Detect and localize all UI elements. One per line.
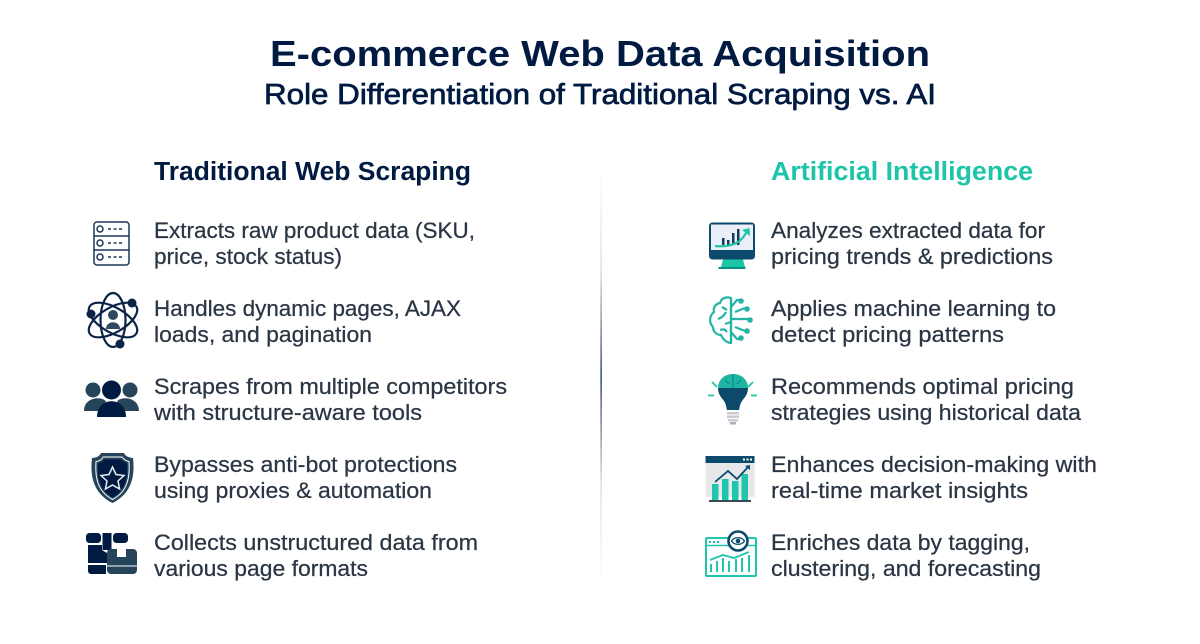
text: recommends: strategies using historical data [771,400,1082,425]
text: analyzes: pricing trends & predictions [771,244,1053,269]
text: enhances [771,452,1097,503]
text: enriches: Enriches data by tagging, [771,530,1030,555]
panel: artificial intelligence [706,158,1097,581]
text: extracts: price, stock status) [154,244,342,269]
text: applies: detect pricing patterns [771,322,1004,347]
text: handles [154,296,461,347]
title: E-commerce Web Data Acquisition [270,33,930,74]
text: scrapes: Scrapes from multiple competitors [154,374,507,399]
text: handles: loads, and pagination [154,322,372,347]
text: bypasses [154,452,457,503]
icon: analytics window with eye [706,532,756,576]
text: enhances: real-time market insights [771,478,1028,503]
icon: server [94,222,129,265]
icon: boxes [86,533,137,574]
icon: brain light bulb [708,374,757,424]
text: extracts: Extracts raw product data (SKU, [154,218,475,243]
icon: people [84,380,139,417]
text: enhances: Enhances decision-making with [771,452,1097,477]
text: scrapes [153,374,507,425]
text: bypasses: using proxies & automation [154,478,432,503]
text: analyzes [771,218,1053,269]
icon: AI brain [710,297,753,343]
text: handles: Handles dynamic pages, AJAX [154,296,461,321]
heading: artificial intelligence: Artificial Intelligence [771,158,1033,186]
text: applies [771,296,1056,347]
text: collects: various page formats [154,556,368,581]
text: applies: Applies machine learning to [771,296,1056,321]
subtitle: Role Differentiation of Traditional Scraping vs. AI [264,79,936,111]
text: collects: Collects unstructured data from [154,530,478,555]
icon: shield with star [91,453,134,503]
panel: traditional web scraping [83,158,507,581]
icon: atom with user [83,293,143,348]
text: collects [154,530,478,581]
text: recommends [771,374,1082,425]
text: enriches: clustering, and forecasting [771,556,1041,581]
text: scrapes: with structure-aware tools [153,400,422,425]
heading: traditional web scraping: Traditional Web Scraping [154,158,471,186]
icon: monitor with chart [709,222,755,269]
text: extracts [154,218,475,269]
text: analyzes: Analyzes extracted data for [771,218,1045,243]
text: recommends: Recommends optimal pricing [771,374,1074,399]
text: bypasses: Bypasses anti-bot protections [154,452,457,477]
icon: dashboard chart [706,456,754,502]
text: enriches [771,530,1041,581]
